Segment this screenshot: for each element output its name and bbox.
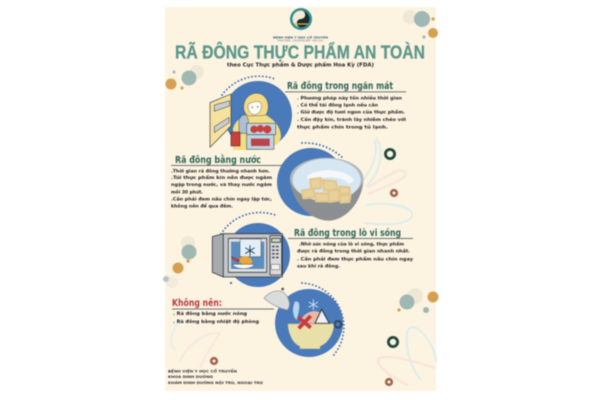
text block: fridge: . Giữ được độ tươi ngon của thực phẩm.: [297, 109, 405, 116]
text block: fridge: [297, 93, 407, 131]
snowflake: [246, 246, 254, 256]
text block: do not: . Rã đông bằng nhiệt độ phòng: [173, 318, 259, 325]
heading: fridge: Rã đông trong ngăn mát: [287, 81, 393, 92]
hospital name: THÂN THIỆN - CHUYÊN NGHIỆP - HIỆU QUẢ: [277, 40, 323, 42]
panel: fridge illustration: [210, 76, 292, 150]
text block: fridge: . Cần đậy kín, tránh lây nhiễm chéo với: [297, 115, 407, 123]
text block: do not: . Rã đông bằng nước nóng: [173, 310, 247, 317]
text block: microwave: . Cần phải đem thực phẩm nấu chín ngay: [297, 254, 413, 262]
text block: do not: [173, 310, 259, 325]
text block: fridge: thực phẩm chín trong tủ lạnh.: [297, 124, 388, 131]
gear: [335, 321, 341, 328]
text block: water: .Túi thực phẩm kín nên được ngâm: [171, 174, 272, 181]
water: [293, 159, 361, 201]
text block: microwave: sau khi rã đông.: [297, 263, 340, 270]
subtitle: theo Cục Thực phẩm & Dược phẩm Hoa Kỳ (FDA): [227, 61, 374, 68]
text block: fridge: . Có thể tái đông lạnh nếu cần: [297, 100, 378, 108]
text block: water: không nên để qua đêm.: [171, 203, 233, 210]
bowl body: [290, 178, 363, 221]
text block: fridge: . Phương pháp này tốn nhiều thời gian: [297, 93, 402, 101]
title: RÃ ĐÔNG THỰC PHẨM AN TOÀN: [175, 42, 425, 62]
footer: [168, 368, 263, 385]
poster background: [165, 7, 436, 391]
pot lid: [264, 291, 290, 310]
milk carton: [239, 115, 248, 133]
decoration: petals: [171, 137, 436, 385]
text block: water: mỗi 30 phút.: [171, 188, 203, 195]
decoration: lower right cluster: [397, 288, 438, 313]
text block: microwave: được rã đông trong thời gian nhanh nhất.: [297, 248, 410, 255]
text block: water: .Thời gian rã đông thường nhanh hơn.: [171, 167, 270, 174]
text block: water: .Cần phải đem nấu chín ngay lập tức,: [171, 195, 272, 203]
red cup: [231, 132, 240, 146]
text block: water: [171, 167, 272, 210]
text block: water: ngập trong nước, và thay nước ngâm: [171, 181, 272, 188]
hospital name: BỆNH VIỆN Y HỌC CỔ TRUYỀN: [273, 34, 329, 40]
decoration: mid left cluster: [163, 236, 196, 288]
chicken: [238, 256, 252, 265]
footer: KHÁM DINH DƯỠNG NỘI TRÚ, NGOẠI TRÚ: [168, 380, 263, 385]
tofu pieces: [302, 178, 351, 203]
meat box: [247, 135, 274, 149]
panel: water bowl illustration: [277, 143, 363, 221]
text block: microwave: [297, 240, 413, 270]
food in bowl: [300, 311, 328, 323]
decoration: rings: [211, 149, 398, 385]
footer: KHOA DINH DƯỠNG: [168, 374, 213, 379]
microwave body: [212, 234, 223, 277]
footer: BỆNH VIỆN Y HỌC CỔ TRUYỀN: [168, 368, 237, 373]
panel: do-not illustration: [264, 283, 344, 357]
bowl: [288, 324, 334, 349]
decoration: top left cluster: [166, 65, 204, 90]
text block: microwave: .Nhờ sức nóng của lò vi sóng, thực phẩm: [299, 240, 404, 247]
decoration: top right cluster: [403, 10, 438, 39]
heading: microwave: Rã đông trong lò vi sóng: [294, 228, 401, 239]
window: [231, 242, 264, 269]
water pour: [293, 301, 299, 320]
woman: [233, 113, 281, 150]
tomato box: [247, 123, 276, 135]
logo: [290, 8, 312, 30]
heading: do not: Không nên:: [172, 298, 222, 309]
fridge door: [210, 94, 231, 147]
heading: water: Rã đông bằng nước: [175, 155, 261, 166]
control panel: [270, 236, 282, 275]
plate: [232, 264, 254, 269]
snowflake: [309, 299, 318, 310]
cross: [298, 316, 311, 328]
panel: microwave illustration: [212, 212, 290, 287]
hospital name: [273, 34, 329, 42]
